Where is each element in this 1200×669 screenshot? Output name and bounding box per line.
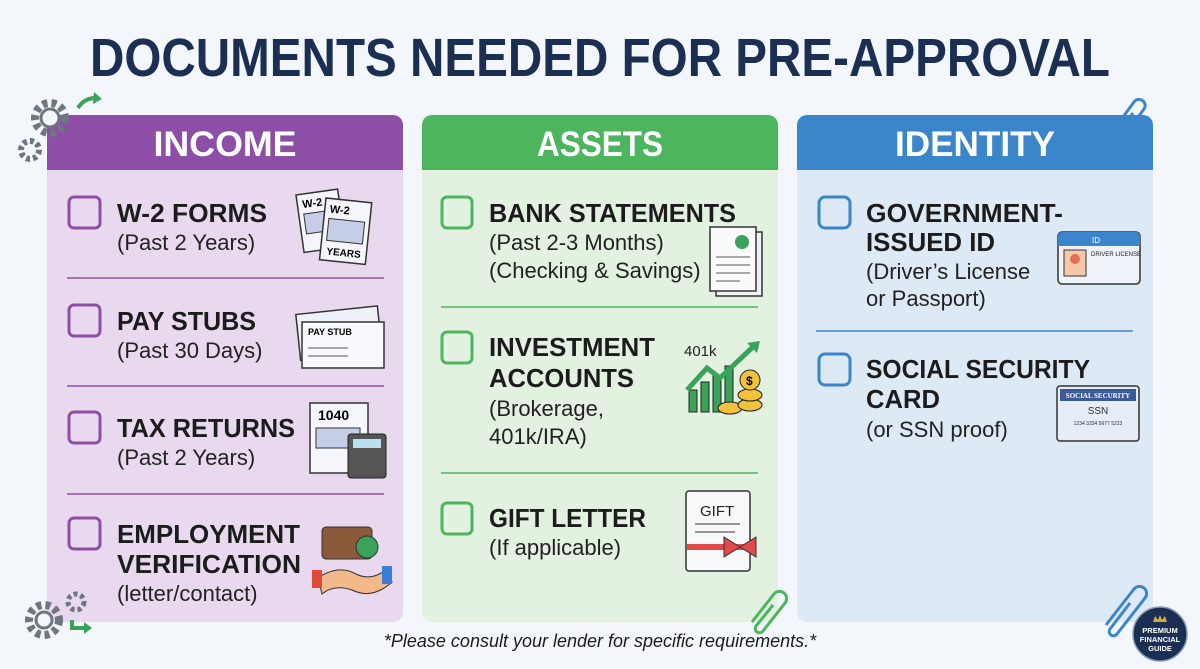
item: tax returns: TAX RETURNS bbox=[117, 413, 295, 443]
heading: identity: IDENTITY bbox=[895, 125, 1055, 164]
icon: paperclip identity bbox=[1106, 586, 1147, 636]
item: investment accounts: ACCOUNTS bbox=[489, 363, 634, 393]
item: investment accounts bbox=[442, 332, 762, 449]
item: social security card: SSN bbox=[1088, 406, 1108, 417]
item: gift letter bbox=[442, 491, 756, 571]
icon: paperclip assets bbox=[752, 591, 787, 633]
item: government-issued id: ID bbox=[1092, 236, 1100, 245]
item: w-2 forms: YEARS bbox=[326, 246, 362, 261]
item: bank statements: (Past 2-3 Months) bbox=[489, 230, 664, 255]
badge: premium financial guide: PREMIUM bbox=[1142, 626, 1178, 635]
badge: premium financial guide: FINANCIAL bbox=[1140, 635, 1181, 644]
panel: income bbox=[47, 115, 403, 622]
item: w-2 forms: W-2 FORMS bbox=[117, 198, 267, 228]
item: social security card: SOCIAL SECURITY bbox=[866, 354, 1090, 384]
heading: assets: ASSETS bbox=[537, 125, 663, 164]
item: social security card bbox=[819, 354, 1139, 442]
item: employment verification: (letter/contact) bbox=[117, 581, 258, 606]
icon: gears top left bbox=[21, 92, 102, 159]
item: bank statements: BANK STATEMENTS bbox=[489, 198, 736, 228]
item: bank statements bbox=[442, 197, 762, 296]
item: investment accounts: 401k bbox=[684, 343, 717, 360]
item: social security card: (or SSN proof) bbox=[866, 417, 1008, 442]
item: pay stubs: (Past 30 Days) bbox=[117, 338, 262, 363]
item: investment accounts: (Brokerage, bbox=[489, 396, 604, 421]
panel: assets bbox=[422, 115, 778, 622]
badge: premium financial guide bbox=[1133, 607, 1187, 661]
item: pay stubs: PAY STUBS bbox=[117, 306, 256, 336]
item: government-issued id: DRIVER LICENSE bbox=[1091, 252, 1141, 258]
item: employment verification: EMPLOYMENT bbox=[117, 519, 300, 549]
item: pay stubs bbox=[69, 305, 384, 368]
icon: gears bottom left bbox=[29, 594, 92, 635]
item: government-issued id: (Driver’s License bbox=[866, 259, 1030, 284]
item: social security card: CARD bbox=[866, 384, 940, 414]
item: w-2 forms: W-2 bbox=[329, 203, 350, 218]
item: investment accounts: 401k/IRA) bbox=[489, 424, 587, 449]
item: tax returns bbox=[69, 403, 386, 478]
footer note: *Please consult your lender for specific requirements.* bbox=[384, 631, 817, 651]
item: government-issued id: or Passport) bbox=[866, 286, 986, 311]
item: government-issued id: ISSUED ID bbox=[866, 227, 995, 257]
item: employment verification bbox=[69, 518, 392, 606]
item: pay stubs: PAY STUB bbox=[308, 327, 352, 337]
item: bank statements: (Checking & Savings) bbox=[489, 258, 701, 283]
item: w-2 forms bbox=[69, 189, 372, 264]
item: tax returns: (Past 2 Years) bbox=[117, 445, 255, 470]
item: government-issued id: GOVERNMENT- bbox=[866, 198, 1063, 228]
item: social security card: SOCIAL SECURITY bbox=[1066, 392, 1130, 400]
item: tax returns: 1040 bbox=[318, 407, 349, 423]
item: investment accounts: $ bbox=[746, 374, 753, 388]
item: w-2 forms: W-2 bbox=[302, 196, 323, 211]
item: investment accounts: INVESTMENT bbox=[489, 332, 655, 362]
item: w-2 forms: (Past 2 Years) bbox=[117, 230, 255, 255]
item: social security card: 1234 3334 5677 5223 bbox=[1074, 421, 1123, 427]
icon: paperclip top right bbox=[1112, 99, 1145, 140]
item: gift letter: (If applicable) bbox=[489, 535, 621, 560]
item: employment verification: VERIFICATION bbox=[117, 549, 301, 579]
item: gift letter: GIFT LETTER bbox=[489, 503, 646, 533]
item: government-issued id bbox=[819, 197, 1141, 311]
heading: income: INCOME bbox=[154, 125, 296, 164]
badge: premium financial guide: GUIDE bbox=[1148, 644, 1172, 653]
item: gift letter: GIFT bbox=[700, 503, 734, 520]
panel: identity bbox=[797, 115, 1153, 622]
